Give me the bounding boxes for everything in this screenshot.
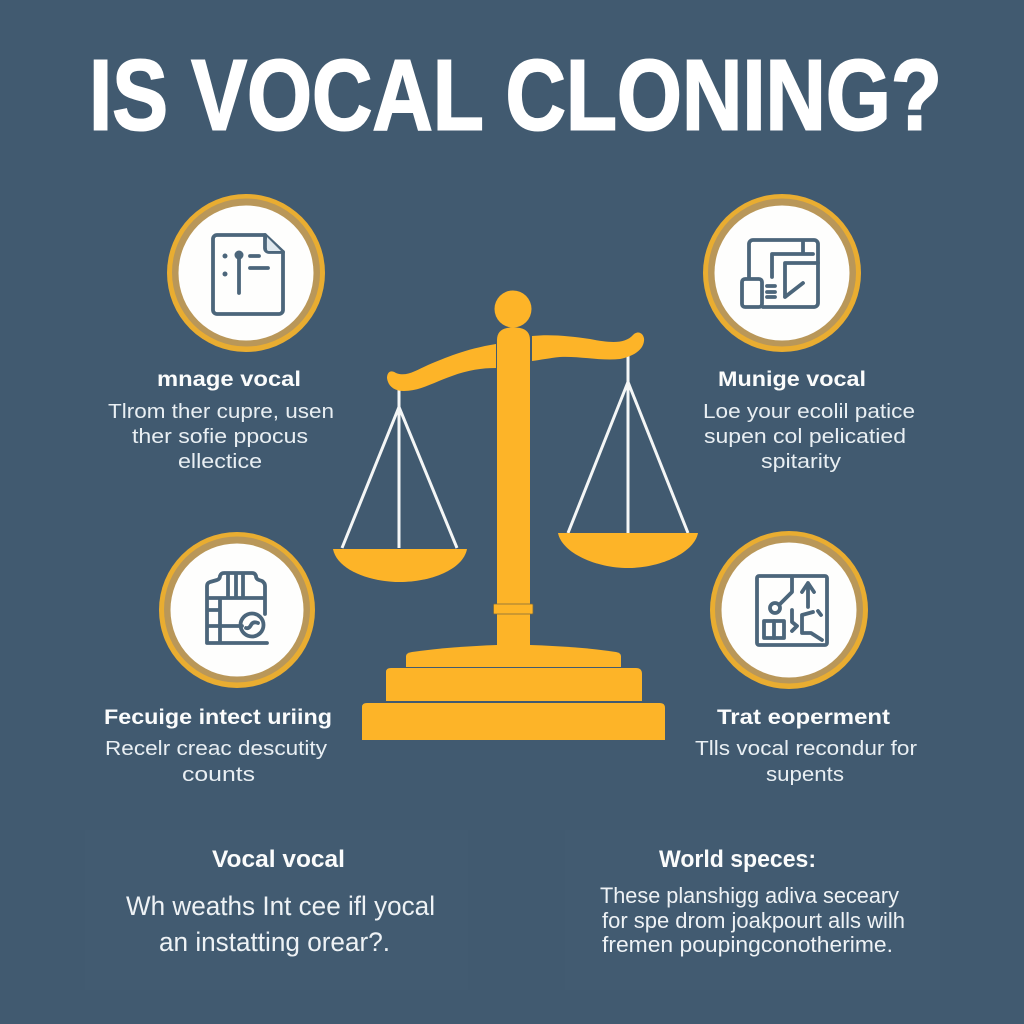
text block: ther sofie ppocus [132,425,308,448]
text block: supents [766,763,844,786]
text block: fremen poupingconotherime. [602,932,893,957]
text block: ellectice [178,450,262,473]
text block [703,400,915,473]
panel: bottom right feature [695,531,917,786]
heading: Fecuige intect uriing [104,706,332,729]
text block: supen col pelicatied [704,425,906,448]
heading: mnage vocal [157,368,301,391]
knob [494,290,532,328]
text block: Wh weaths Int cee ifl yocal [126,891,435,921]
icon: document [167,194,325,352]
text block: These planshigg adiva seceary [600,883,899,908]
right beam [532,333,644,361]
collar [494,604,533,614]
text block [108,400,334,473]
text block: spitarity [761,450,842,473]
text block: for spe drom joakpourt alls wilh [602,908,905,933]
left beam [387,344,496,391]
base middle tier [386,668,642,701]
text block: Recelr creac descutity [105,737,328,760]
panel: bottom left feature [104,532,332,786]
heading: World speces: [659,846,816,873]
post [497,327,533,645]
text block [600,883,905,957]
icon: storage card [159,532,315,688]
panel: top right feature [703,194,915,473]
left pan [333,549,467,582]
icon: layout with check [703,194,861,352]
panel: bottom left note [85,830,468,990]
panel: bottom right note [565,830,940,990]
heading: Munige vocal [718,368,866,391]
base top tier [406,645,621,667]
text block [126,891,435,957]
text block: Tlls vocal recondur for [695,737,917,760]
scale strings [342,354,688,548]
text block [105,737,328,786]
text block [695,737,917,786]
text block: Loe your ecolil patice [703,400,915,423]
heading: Vocal vocal [212,846,345,873]
panel: top left feature [108,194,334,473]
text block: an instatting orear?. [159,927,390,957]
scales of justice [333,290,698,740]
heading: Trat eoperment [717,706,890,729]
icon: circuit diagram [710,531,868,689]
right pan [558,533,698,568]
text block: counts [182,763,255,786]
base bottom tier [362,703,665,740]
text block: Tlrom ther cupre, usen [108,400,334,423]
